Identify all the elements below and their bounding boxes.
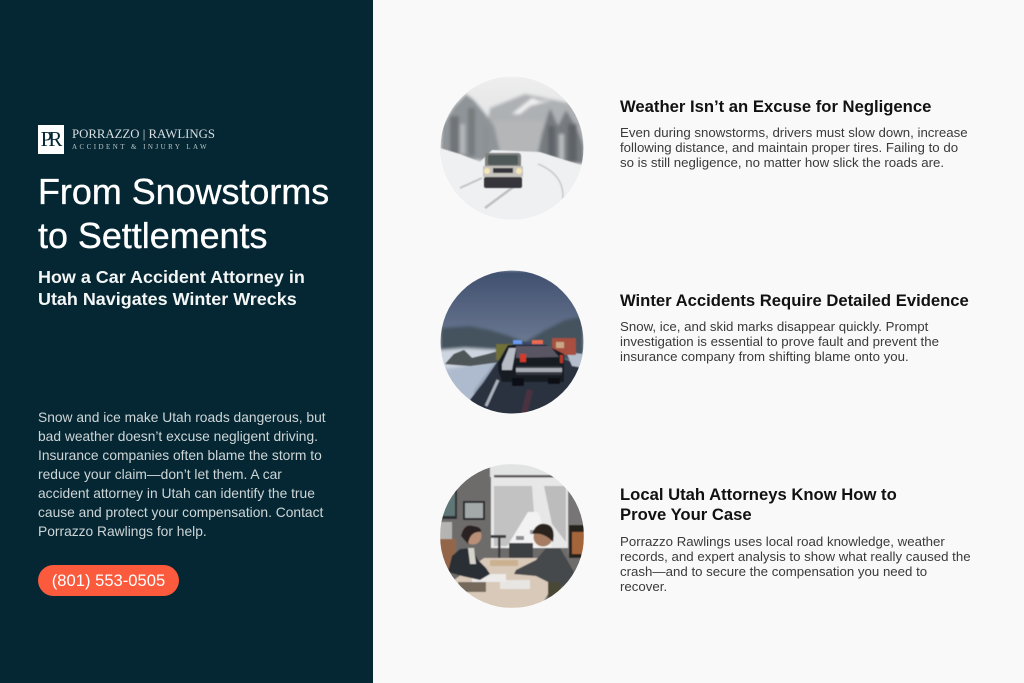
table xyxy=(454,558,548,608)
subtitle: Utah Navigates Winter Wrecks xyxy=(38,288,297,308)
fire truck xyxy=(552,338,576,355)
icon: PR monogram: PR xyxy=(41,127,58,151)
phone button: (801) 553-0505 xyxy=(52,571,165,590)
logo xyxy=(38,125,215,154)
text: evidence: Snow, ice, and skid marks disappear quickly. Prompt xyxy=(620,318,928,334)
panel: dark left sidebar xyxy=(0,0,373,683)
title: From Snowstorms xyxy=(38,172,329,212)
photo: police car at crash scene xyxy=(440,270,584,414)
heading: weather: Weather Isn’t an Excuse for Negligence xyxy=(620,96,931,116)
man xyxy=(514,524,574,600)
photo: attorneys at table xyxy=(440,464,584,608)
title xyxy=(38,172,329,256)
logo wordmark: PORRAZZO | RAWLINGS xyxy=(72,127,215,141)
heading: local attorneys xyxy=(620,484,897,524)
subtitle: How a Car Accident Attorney in xyxy=(38,267,305,287)
heading: local attorneys: Local Utah Attorneys Know How to xyxy=(620,484,897,504)
photo: SUV on snowy road xyxy=(440,77,584,220)
text: weather: so is still negligence, no matter how slick the roads are. xyxy=(620,155,944,170)
debris xyxy=(445,350,502,366)
text: local attorneys: crash—and to secure the compensation you need to xyxy=(620,564,927,579)
text: evidence: insurance company from shifting blame onto you. xyxy=(620,349,909,364)
window xyxy=(491,477,568,548)
wall pictures xyxy=(463,501,485,520)
subtitle xyxy=(38,267,305,308)
text: evidence xyxy=(620,318,939,364)
text: local attorneys: records, and expert analysis to show what really caused the xyxy=(620,549,971,564)
text: local attorneys xyxy=(620,534,971,594)
heading: local attorneys: Prove Your Case xyxy=(620,505,752,524)
title: to Settlements xyxy=(38,216,267,256)
text: weather: following distance, and maintain proper tires. Failing to do xyxy=(620,140,958,155)
intro paragraph: Insurance companies often blame the storm to xyxy=(38,448,322,463)
woman xyxy=(448,525,490,580)
logo tagline: ACCIDENT & INJURY LAW xyxy=(72,143,209,151)
icon: SUV xyxy=(483,153,523,188)
laptop xyxy=(509,543,533,558)
intro paragraph: bad weather doesn’t excuse negligent driving. xyxy=(38,429,318,444)
text: local attorneys: recover. xyxy=(620,579,667,594)
text: local attorneys: Porrazzo Rawlings uses local road knowledge, weather xyxy=(620,534,945,548)
phone button xyxy=(38,565,179,596)
intro paragraph: Porrazzo Rawlings for help. xyxy=(38,524,207,539)
police SUV xyxy=(498,340,564,386)
text: evidence: investigation is essential to prove fault and prevent the xyxy=(620,334,939,349)
icon: PR monogram xyxy=(38,125,64,154)
intro paragraph: reduce your claim—don’t let them. A car xyxy=(38,467,282,482)
intro paragraph: Snow and ice make Utah roads dangerous, but xyxy=(38,410,326,424)
text: weather xyxy=(620,124,968,170)
intro paragraph: accident attorney in Utah can identify the true xyxy=(38,486,315,501)
intro paragraph: cause and protect your compensation. Contact xyxy=(38,505,323,520)
heading: evidence: Winter Accidents Require Detailed Evidence xyxy=(620,290,969,310)
text: weather: Even during snowstorms, drivers must slow down, increase xyxy=(620,124,968,140)
intro paragraph xyxy=(38,410,326,539)
